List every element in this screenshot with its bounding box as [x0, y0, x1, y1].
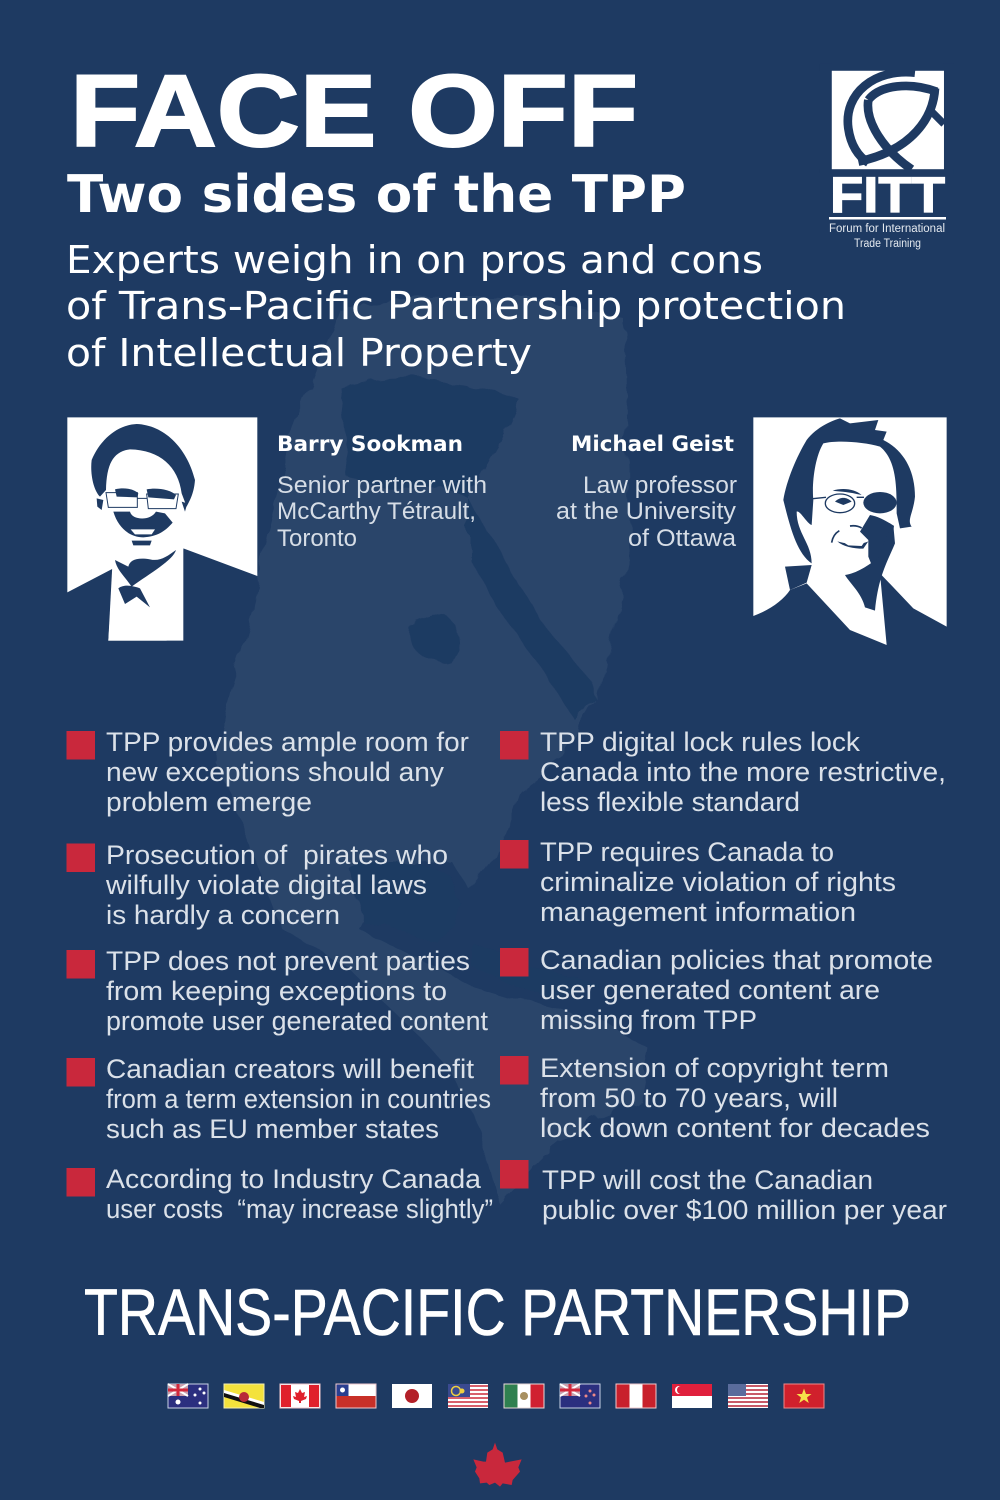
bullet 3: TPP does not prevent parties [106, 946, 470, 976]
bullet 4: from 50 to 70 years, will [540, 1083, 838, 1113]
portrait: Michael Geist [753, 417, 947, 645]
bullet 4 [66, 1054, 491, 1144]
bullet 2: wilfully violate digital laws [105, 870, 427, 900]
intro text: of Trans-Pacific Partnership protection [66, 284, 846, 328]
bullet 4 [500, 1053, 930, 1143]
bullet 1: problem emerge [106, 787, 312, 817]
bullet 2: is hardly a concern [106, 900, 340, 930]
background globe map [213, 296, 650, 1205]
flag: Chile [336, 1384, 376, 1408]
bullet 1: Canada into the more restrictive, [540, 757, 946, 787]
bullet 4: Extension of copyright term [540, 1053, 889, 1083]
flag: Brunei [224, 1384, 264, 1408]
icon: globe in white square [820, 63, 954, 174]
flag: Japan [392, 1384, 432, 1408]
logo tagline: Trade Training [854, 238, 921, 250]
title: FACE OFF [70, 54, 638, 168]
bullet 1: TPP provides ample room for [106, 727, 469, 757]
bullet 4: lock down content for decades [540, 1113, 930, 1143]
flag: Malaysia [448, 1384, 488, 1408]
bullet 5: According to Industry Canada [106, 1164, 481, 1194]
bullet 3: missing from TPP [540, 1005, 757, 1035]
flag: Singapore [672, 1384, 712, 1408]
bullet 3: promote user generated content [106, 1006, 489, 1036]
flag: Peru [616, 1384, 656, 1408]
intro text: of Intellectual Property [66, 331, 532, 375]
flags row [168, 1384, 824, 1408]
flag: Canada [280, 1384, 320, 1408]
bullet 5 [66, 1164, 493, 1224]
bullet 5: TPP will cost the Canadian [542, 1165, 873, 1195]
bullet 1 [66, 727, 469, 817]
bullet 2: TPP requires Canada to [540, 837, 834, 867]
bullet 5: user costs “may increase slightly” [106, 1194, 493, 1224]
logo wordmark: FITT [830, 167, 945, 223]
bullet 3: user generated content are [540, 975, 880, 1005]
bullet 3 [500, 945, 933, 1035]
icon: maple leaf [473, 1443, 522, 1487]
flag: United States [728, 1384, 768, 1408]
name and role: Barry Sookman: Barry Sookman [277, 432, 463, 457]
right column: arguments against [500, 727, 947, 1225]
intro text [66, 238, 846, 375]
bullet 2: criminalize violation of rights [540, 867, 896, 897]
bullet 2: Prosecution of pirates who [106, 840, 448, 870]
flag: Mexico [504, 1384, 544, 1408]
name and role: Michael Geist: of Ottawa [628, 525, 737, 552]
bullet 4: such as EU member states [106, 1114, 439, 1144]
name and role: Michael Geist [556, 432, 737, 552]
bullet 1 [500, 727, 946, 817]
flag: Australia [168, 1384, 208, 1408]
left column: arguments for [66, 727, 493, 1224]
bullet 1: new exceptions should any [106, 757, 445, 787]
name and role: Barry Sookman: Senior partner with [277, 472, 487, 499]
bullet 4: Canadian creators will benefit [106, 1054, 475, 1084]
portrait: Barry Sookman [67, 417, 257, 641]
subtitle: Two sides of the TPP [67, 165, 686, 225]
name and role: Michael Geist: Michael Geist [571, 432, 734, 457]
bullet 3 [66, 946, 489, 1036]
flag: New Zealand [560, 1384, 600, 1408]
logo tagline [829, 223, 945, 250]
logo tagline: Forum for International [829, 223, 945, 235]
flag: Vietnam [784, 1384, 824, 1408]
bullet 1: TPP digital lock rules lock [540, 727, 861, 757]
name and role: Michael Geist: Law professor [583, 472, 737, 499]
intro text: Experts weigh in on pros and cons [66, 238, 763, 282]
name and role: Michael Geist: at the University [556, 498, 736, 525]
name and role: Barry Sookman: Toronto [277, 525, 357, 552]
name and role: Barry Sookman: McCarthy Tétrault, [277, 498, 476, 525]
bullet 2 [66, 840, 448, 930]
bullet 4: from a term extension in countries [106, 1084, 491, 1114]
logo: FITT [820, 63, 954, 250]
bullet 2: management information [540, 897, 856, 927]
bullet 3: Canadian policies that promote [540, 945, 933, 975]
bullet 3: from keeping exceptions to [106, 976, 447, 1006]
bullet 2 [500, 837, 896, 927]
bullet 1: less flexible standard [540, 787, 800, 817]
bullet 5 [500, 1160, 947, 1225]
bullet 5: public over $100 million per year [542, 1195, 947, 1225]
name and role: Barry Sookman [277, 432, 487, 552]
